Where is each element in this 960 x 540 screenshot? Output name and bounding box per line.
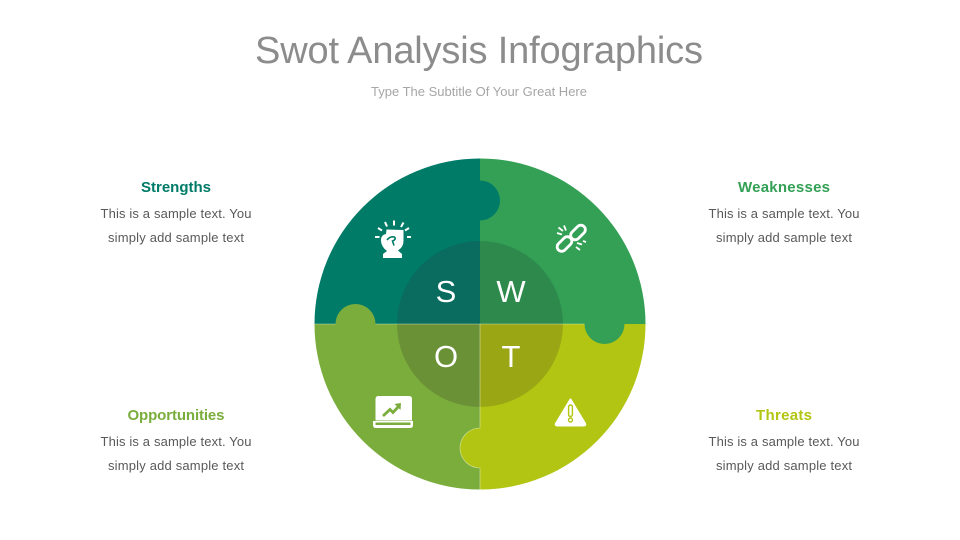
seam lines <box>314 324 584 490</box>
panel: threats text <box>708 407 860 473</box>
text block: opportunities: This is a sample text. You <box>100 434 252 449</box>
text block: threats <box>708 434 860 473</box>
heading: opportunities: Opportunities <box>128 407 224 424</box>
quadrant: strengths <box>314 158 480 324</box>
text block: opportunities: simply add sample text <box>108 458 244 473</box>
heading: weaknesses: Weaknesses <box>738 179 830 196</box>
puzzle tab: strengths <box>480 180 500 220</box>
puzzle tab: threats <box>460 428 480 468</box>
text block: weaknesses: simply add sample text <box>716 230 852 245</box>
heading: threats: Threats <box>756 407 812 424</box>
letter t: T <box>502 339 521 374</box>
text block: strengths <box>100 206 252 245</box>
icon: fist with rays <box>375 220 411 258</box>
text block: weaknesses <box>708 206 860 245</box>
inner circle: t <box>480 324 563 407</box>
quadrant: weaknesses <box>480 158 646 324</box>
panel: weaknesses text <box>708 179 860 245</box>
icon: warning triangle <box>556 400 585 426</box>
letter o: O <box>434 339 458 374</box>
text block: threats: simply add sample text <box>716 458 852 473</box>
icon: broken chain link <box>555 223 587 253</box>
inner circle: o <box>397 324 480 407</box>
chart: swot puzzle circle <box>314 158 646 490</box>
letter s: S <box>436 274 456 309</box>
panel: strengths text <box>100 179 252 245</box>
subtitle: Type The Subtitle Of Your Great Here <box>371 84 587 99</box>
inner circle: s <box>397 241 480 324</box>
text block: opportunities <box>100 434 252 473</box>
puzzle tab: opportunities <box>336 304 376 324</box>
icon: laptop with rising chart <box>373 396 413 428</box>
text block: weaknesses: This is a sample text. You <box>708 206 860 221</box>
quadrant: opportunities <box>314 324 480 490</box>
puzzle tab: weaknesses <box>584 324 624 344</box>
letter w: W <box>496 274 526 309</box>
text block: threats: This is a sample text. You <box>708 434 860 449</box>
heading: strengths: Strengths <box>141 179 211 196</box>
quadrant: threats <box>480 324 646 490</box>
text block: strengths: This is a sample text. You <box>100 206 252 221</box>
text block: strengths: simply add sample text <box>108 230 244 245</box>
panel: opportunities text <box>100 407 252 473</box>
title: Swot Analysis Infographics <box>255 30 703 72</box>
inner circle: w <box>480 241 563 324</box>
